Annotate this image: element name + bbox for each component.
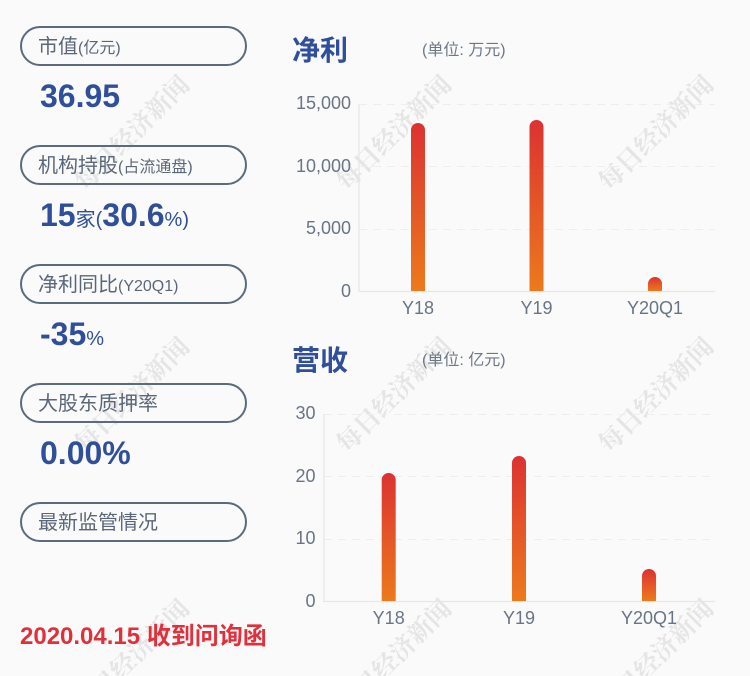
watermarks: 每日经济新闻 <box>327 328 459 460</box>
bar chart: net profit: 15,000 <box>296 93 351 113</box>
watermarks: 每日经济新闻 <box>65 328 197 460</box>
bar chart: net profit: 5,000 <box>306 218 351 238</box>
unit: net profit: (单位: 万元) <box>422 41 506 59</box>
bar chart: revenue: Y20Q1 <box>621 608 677 628</box>
bar chart: revenue: Y18 <box>373 608 405 628</box>
watermarks: 每日经济新闻 <box>589 328 721 460</box>
watermarks: 每日经济新闻 <box>327 66 459 198</box>
panel: share pledge ratio label: 大股东质押率 <box>38 392 158 415</box>
panel: market cap label: 市值(亿元) <box>38 35 121 58</box>
bar chart: net profit: Y18 <box>402 298 434 318</box>
heading: net profit: 净利 <box>292 35 348 66</box>
panel: latest regulation label: 最新监管情况 <box>38 511 158 534</box>
panel: latest regulation label <box>21 503 246 541</box>
regulatory date note: 2020.04.15 收到问询函 <box>20 623 267 650</box>
panel: market cap label <box>21 27 246 65</box>
bar chart: revenue: Y19 <box>503 608 535 628</box>
bar chart: net profit: 0 <box>341 281 351 301</box>
net profit growth value: -35% <box>40 316 104 352</box>
panel: institutional holdings label <box>21 146 246 184</box>
bar chart: revenue: 10 <box>295 528 316 548</box>
watermarks: 每日经济新闻 <box>589 66 721 198</box>
share pledge ratio value: 0.00% <box>40 435 131 471</box>
unit: revenue: (单位: 亿元) <box>422 351 506 369</box>
bar chart: revenue: 20 <box>295 466 316 486</box>
watermarks <box>65 66 721 676</box>
bar chart: net profit <box>296 93 715 318</box>
bar chart: net profit: 10,000 <box>296 156 351 176</box>
panel: institutional holdings label: 机构持股(占流通盘) <box>38 154 193 177</box>
bar chart: net profit: Y19 <box>520 298 553 318</box>
bar chart: net profit: Y20Q1 <box>627 298 683 318</box>
bar chart: revenue <box>295 403 715 628</box>
bar chart: revenue: 0 <box>305 591 316 611</box>
institutional holdings value: 15家(30.6%) <box>40 197 189 233</box>
panel: share pledge ratio label <box>21 384 246 422</box>
bar chart: revenue: 30 <box>295 403 316 423</box>
heading: revenue: 营收 <box>292 345 348 376</box>
panel: net profit growth label <box>21 265 246 303</box>
market cap value: 36.95 <box>40 78 120 114</box>
watermarks: 每日经济新闻 <box>65 66 197 198</box>
panel: net profit growth label: 净利同比(Y20Q1) <box>38 273 178 296</box>
